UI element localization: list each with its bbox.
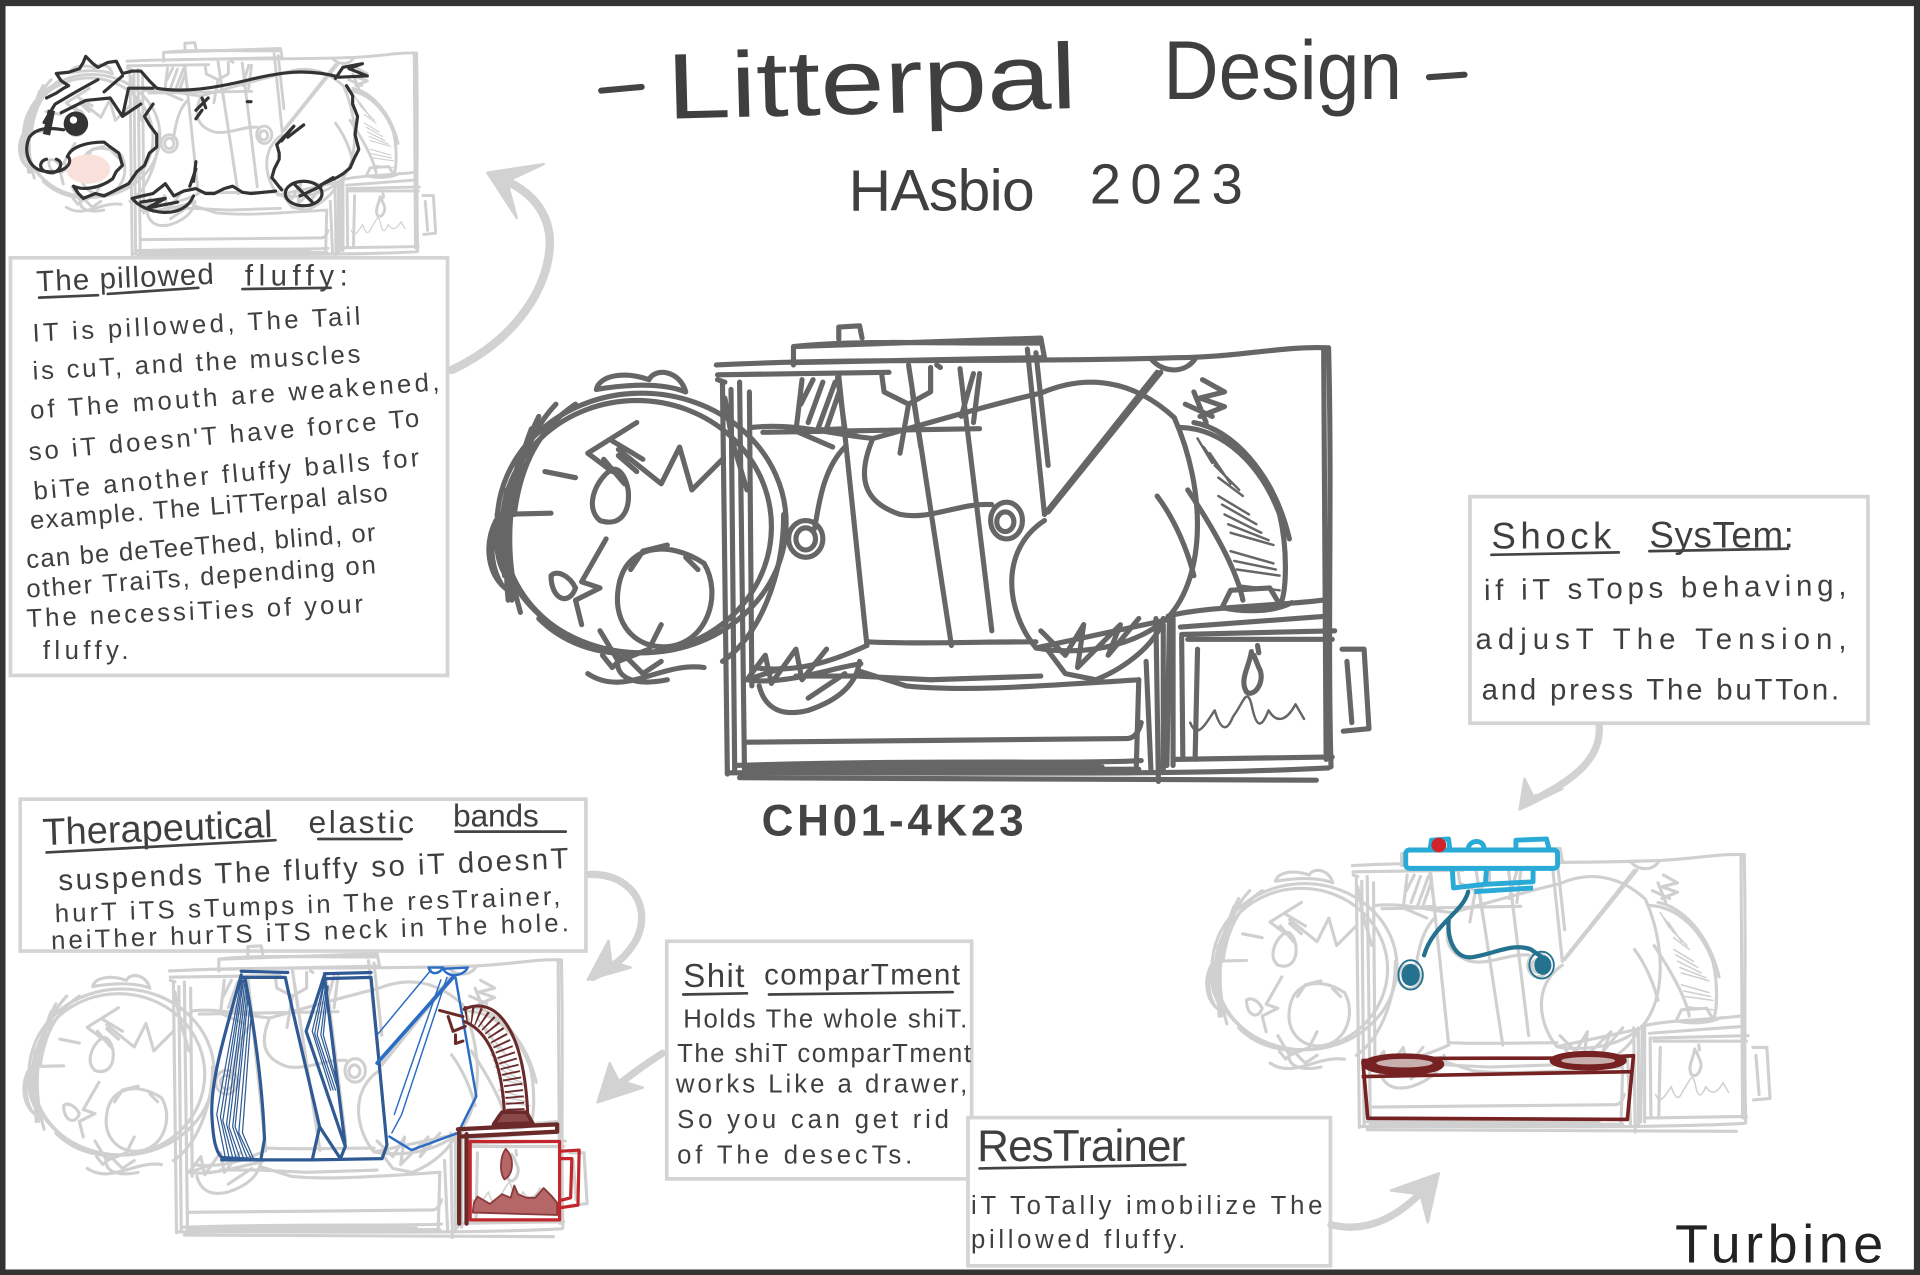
body text: Holds The whole shiT. <box>683 1006 967 1034</box>
icon: pillowed fluffy creature <box>27 56 367 212</box>
body text: hurT iTS sTumps in The resTrainer, <box>54 883 561 928</box>
body text: pillowed fluffy. <box>971 1226 1185 1254</box>
body text: and press The buTTon. <box>1482 673 1839 706</box>
body text: of The desecTs. <box>677 1142 912 1170</box>
body text: can be deTeeThed, blind, or <box>25 519 377 574</box>
heading <box>1491 514 1794 557</box>
title: Litterpal <box>665 24 1078 139</box>
heading: Therapeutical <box>42 804 273 854</box>
heading <box>36 258 348 298</box>
heading: SysTem: <box>1649 514 1794 555</box>
icon: electrode wires <box>1398 892 1554 990</box>
body text: biTe another fluffy balls for <box>32 444 421 506</box>
panel: elastic bands sketch <box>24 946 587 1237</box>
body text: example. The LiTTerpal also <box>29 479 389 535</box>
body text: is cuT, and the muscles <box>32 341 361 386</box>
icon: restrainer outline <box>1362 1053 1633 1119</box>
body text: other TraiTs, depending on <box>25 551 377 604</box>
panel: shock system text <box>1470 497 1868 723</box>
icon: red button <box>1431 838 1446 852</box>
body text <box>51 842 569 955</box>
subtitle: 2023 <box>1090 152 1243 215</box>
ghost device sketch <box>24 946 587 1237</box>
elastic bands <box>212 971 387 1160</box>
body text: adjusT The Tension, <box>1476 623 1847 656</box>
body text: if iT sTops behaving, <box>1484 569 1847 607</box>
icon: eye <box>47 110 88 136</box>
panel: shock system sketch <box>1207 838 1770 1132</box>
heading: Shock <box>1491 516 1612 557</box>
body text: suspends The fluffy so iT doesnT <box>58 842 569 897</box>
heading: bands <box>453 798 539 834</box>
heading: The pillowed <box>36 258 214 298</box>
waste compartment <box>470 1141 579 1220</box>
panel: therapeutical elastic bands text <box>20 798 586 955</box>
panel: shit compartment text <box>667 941 972 1179</box>
title <box>601 24 1464 139</box>
panel: the pillowed fluffy text <box>10 258 448 675</box>
signature: Turbine <box>1675 1215 1883 1275</box>
body text: so iT doesn'T have force To <box>27 404 420 466</box>
arrow: restrainer text to restrainer sketch <box>1331 1173 1439 1227</box>
body text <box>25 303 440 665</box>
arrow: shock text to shock unit <box>1520 726 1599 810</box>
body text: IT is pillowed, The Tail <box>32 303 361 348</box>
icon: shock controller <box>1406 839 1558 892</box>
heading: fluffy: <box>245 259 348 292</box>
body text: neiTher hurTS iTS neck in The hole. <box>51 909 569 955</box>
icon: cheek blush <box>66 154 110 184</box>
body text: So you can get rid <box>677 1106 949 1134</box>
body text <box>675 1006 971 1170</box>
title: Design <box>1163 24 1402 117</box>
heading: ResTrainer <box>977 1122 1185 1171</box>
panel: pillowed fluffy sketch <box>19 43 436 258</box>
body text: fluffy. <box>43 637 129 665</box>
body text: The shiT comparTment <box>677 1040 971 1068</box>
main sketch: litterpal device <box>489 326 1369 781</box>
body text: iT ToTally imobilize The <box>971 1192 1322 1220</box>
body text: The necessiTies of your <box>26 590 364 633</box>
heading: elastic <box>309 804 414 840</box>
body text: of The mouth are weakened, <box>29 368 440 425</box>
body text <box>1476 569 1847 706</box>
model code label: CH01-4K23 <box>762 796 1024 845</box>
subtitle: HAsbio <box>849 159 1035 224</box>
ghost device sketch <box>1207 840 1770 1132</box>
arrow: bands text to bands sketch <box>588 874 642 980</box>
heading <box>683 958 960 995</box>
heading: Shit <box>683 958 744 995</box>
arrow: pillowed text to fluffy sketch <box>452 164 550 370</box>
pulley straps <box>377 968 476 1150</box>
heading: comparTment <box>764 959 960 992</box>
heading <box>42 798 566 854</box>
ghost device sketch <box>19 43 436 258</box>
panel: restrainer text <box>968 1118 1330 1266</box>
body text: works Like a drawer, <box>675 1071 967 1099</box>
waste hose <box>440 1006 557 1224</box>
arrow: compartment text to compartment sketch <box>598 1053 662 1102</box>
body text <box>971 1192 1322 1254</box>
subtitle <box>849 152 1243 224</box>
